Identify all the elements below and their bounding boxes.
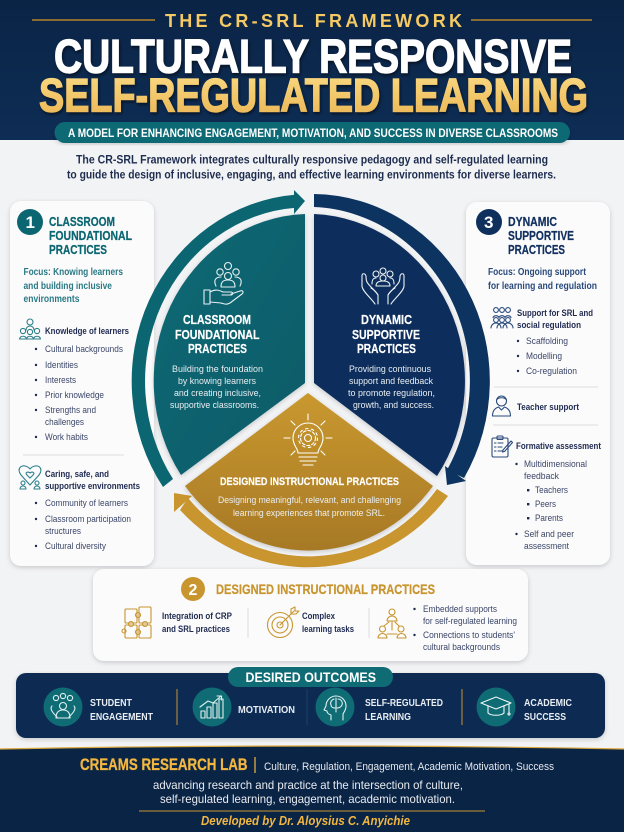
knowledge of learners list: challenges [45,417,84,427]
icon: teacher [492,396,510,416]
panel: designed instructional practices detail [93,569,528,661]
segment heading: DYNAMIC [361,313,412,327]
panel: desired outcomes [16,667,605,738]
support for SRL list: social regulation [517,320,581,330]
segment: designed instructional practices [185,393,433,551]
formative assessment list: Parents [535,513,563,523]
segment description: growth, and success. [353,400,434,411]
segment description: Providing continuous [349,364,431,375]
knowledge of learners list: Cultural backgrounds [45,344,123,354]
segment heading [175,313,260,356]
icon: caring heart [19,466,41,489]
arrow: teal ring [132,190,305,487]
segment description: Building the foundation [172,364,263,375]
icon: puzzle [122,607,151,638]
number badge 3: 3 [484,213,493,232]
segment description [348,364,435,411]
panel heading: FOUNDATIONAL [49,229,132,243]
panel heading: CLASSROOM [49,215,115,229]
segment heading: SUPPORTIVE [352,328,420,342]
arrow: gold ring [174,489,448,567]
support for SRL list: Support for SRL and [517,308,593,318]
panel heading [49,215,132,257]
formative assessment list: assessment [524,541,569,551]
segment heading [352,313,420,356]
cycle diagram [132,190,490,567]
support for SRL list: Co-regulation [526,366,577,376]
number badge 3 [476,209,502,235]
number badge 2 [181,577,205,601]
icon: hands supporting people [362,268,404,304]
outcome: academic success: ACADEMIC [524,697,572,709]
footer band [0,746,624,832]
integration label: and SRL practices [162,624,230,634]
knowledge of learners list: Identities [45,360,78,370]
complex tasks label: Complex [302,611,335,621]
caring, safe, and supportive environments list: Caring, safe, and [45,469,109,479]
support for SRL list: Scaffolding [526,336,568,346]
segment heading: FOUNDATIONAL [175,328,260,342]
icon: social group [491,308,513,328]
outcome: self-regulated learning: SELF-REGULATED [365,697,443,709]
panel heading [508,215,574,257]
arrow: navy ring [314,194,490,485]
segment description [170,364,263,411]
knowledge of learners list: Prior knowledge [45,390,104,400]
focus text: and building inclusive [24,281,112,292]
focus text: Focus: Ongoing support [488,267,587,278]
caring, safe, and supportive environments list [35,469,140,551]
formative assessment list: Peers [535,499,556,509]
intro text: to guide the design of inclusive, engaging, and effective learning environments for diverse learners. [67,170,556,182]
outcome: student engagement [44,688,153,726]
support for SRL list: Modelling [526,351,562,361]
segment description: by knowing learners [178,376,256,387]
header band [0,0,624,140]
segment description: to promote regulation, [348,388,435,399]
caring, safe, and supportive environments list: structures [45,526,81,536]
segment heading: DESIGNED INSTRUCTIONAL PRACTICES [220,476,399,488]
formative assessment list: Teachers [535,485,568,495]
focus text: environments [24,294,80,305]
formative assessment list: Self and peer [524,529,574,539]
icon: learners [20,319,40,339]
embedded supports list: Embedded supports [423,604,497,614]
intro text [67,154,556,182]
outcome: self-regulated learning: LEARNING [365,711,411,723]
lab keywords: Culture, Regulation, Engagement, Academic Motivation, Success [264,761,554,773]
integration label [162,611,232,634]
intro text: The CR-SRL Framework integrates culturally responsive pedagogy and self-regulated learning [76,154,548,166]
number badge 1: 1 [26,213,35,232]
lab mission: advancing research and practice at the intersection of culture, [153,778,463,792]
focus text: for learning and regulation [488,281,597,292]
knowledge of learners list: Strengths and [45,405,96,415]
segment heading: CLASSROOM [183,313,251,327]
outcome: academic success: SUCCESS [524,711,566,723]
number badge 2: 2 [188,582,198,599]
outcomes heading pill: DESIRED OUTCOMES [246,669,376,685]
knowledge of learners list [35,326,129,442]
panel heading: PRACTICES [508,243,565,257]
panel heading: PRACTICES [49,243,107,257]
caring, safe, and supportive environments list: Classroom participation [45,514,131,524]
segment description [218,495,401,519]
teacher support label: Teacher support [517,402,579,412]
outcome: academic success [476,688,572,726]
lab name: CREAMS RESEARCH LAB [80,755,248,774]
formative assessment list: feedback [524,471,559,481]
author credit: Developed by Dr. Aloysius C. Anyichie [201,814,410,828]
formative assessment list [515,441,601,551]
title [39,30,588,122]
embedded supports list: Connections to students' [423,630,515,640]
icon: clipboard [492,436,512,457]
segment description: support and feedback [349,376,433,387]
panel heading: SUPPORTIVE [508,229,574,243]
segment: classroom foundational practices [154,214,305,475]
support for SRL list [517,308,593,376]
outcome: self-regulated learning [316,688,443,726]
knowledge of learners list: Interests [45,375,76,385]
integration label: Integration of CRP [162,611,232,621]
outcome: student engagement: ENGAGEMENT [90,711,153,723]
complex tasks label: learning tasks [302,624,354,634]
embedded supports list: cultural backgrounds [423,642,500,652]
icon: hand holding people [204,262,243,304]
segment description: learning experiences that promote SRL. [233,508,385,519]
icon: lightbulb with gear [284,414,332,465]
panel: classroom foundational practices [10,201,154,566]
segment heading: PRACTICES [357,342,416,356]
focus text [24,267,123,305]
segment description: and creating inclusive, [174,388,261,399]
complex tasks label [302,611,354,634]
caring, safe, and supportive environments list: Cultural diversity [45,541,106,551]
eyebrow: the framework: THE CR-SRL FRAMEWORK [165,11,462,31]
segment heading: PRACTICES [188,342,247,356]
knowledge of learners list: Work habits [45,432,88,442]
segment: dynamic supportive practices [314,214,465,476]
formative assessment list: Formative assessment [516,441,601,451]
panel heading: DESIGNED INSTRUCTIONAL PRACTICES [216,581,435,597]
segment description: Designing meaningful, relevant, and challenging [218,495,401,506]
formative assessment list: Multidimensional [524,459,587,469]
focus text [488,267,597,292]
outcome: motivation: MOTIVATION [238,704,295,716]
embedded supports list [413,604,517,652]
subtitle pill [54,122,570,143]
segment description: supportive classrooms. [170,400,259,411]
subtitle pill: A MODEL FOR ENHANCING ENGAGEMENT, MOTIVATION, AND SUCCESS IN DIVERSE CLASSROOMS [68,128,558,140]
panel: dynamic supportive practices [466,202,610,565]
knowledge of learners list: Knowledge of learners [45,326,129,336]
icon: connected people [378,609,406,638]
caring, safe, and supportive environments list: Community of learners [45,498,128,508]
outcome: student engagement: STUDENT [90,697,132,709]
focus text: Focus: Knowing learners [24,267,123,278]
panel heading: DYNAMIC [508,215,557,229]
caring, safe, and supportive environments list: supportive environments [45,481,140,491]
lab mission [153,778,463,806]
embedded supports list: for self-regulated learning [423,616,517,626]
outcome: motivation [192,688,295,726]
number badge 1 [17,209,43,235]
lab mission: self-regulated learning, engagement, academic motivation. [160,792,455,806]
icon: target [268,607,299,638]
